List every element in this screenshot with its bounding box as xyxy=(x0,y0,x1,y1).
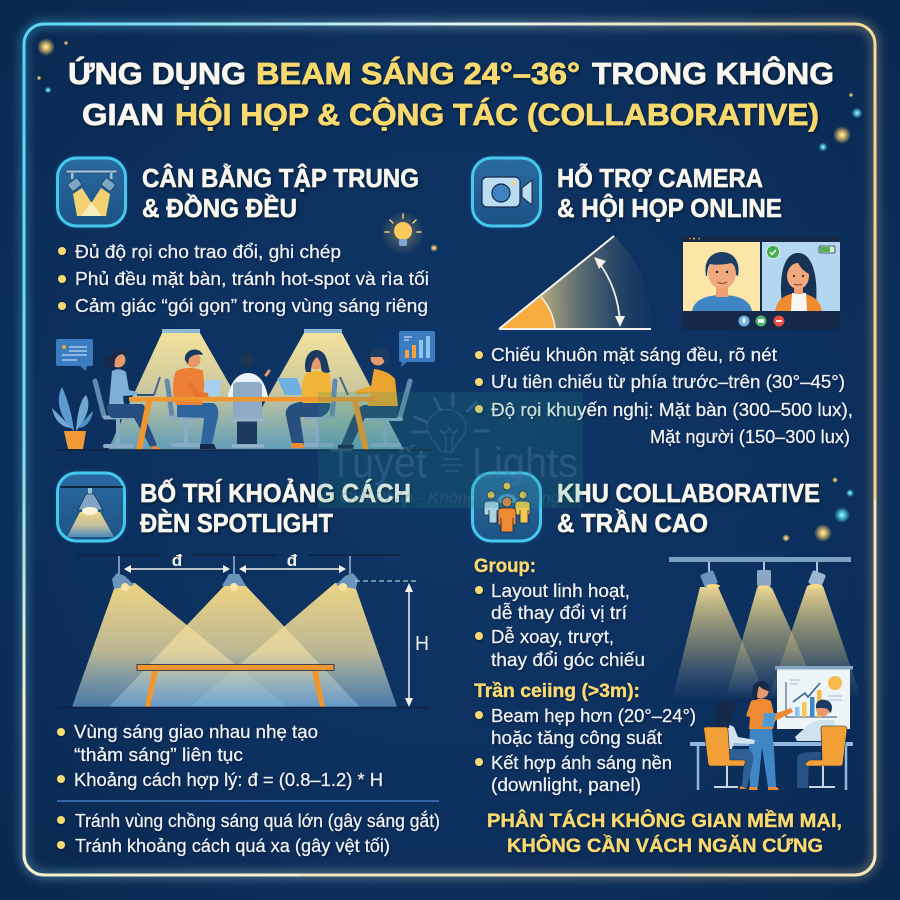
presenter xyxy=(746,681,793,790)
heading: CÂN BẰNG TẬP TRUNG xyxy=(142,163,419,193)
panel: khu collaborative xyxy=(472,473,862,857)
icon: pendant spotlight xyxy=(58,473,124,541)
video participant: man xyxy=(692,252,752,311)
icon: group of people xyxy=(472,473,540,541)
heading xyxy=(557,478,820,538)
heading: & ĐỒNG ĐỀU xyxy=(142,193,297,223)
bullet list: Cảm giác “gói gọn” trong vùng sáng riêng xyxy=(75,296,428,316)
text: group: Group: xyxy=(474,556,536,577)
icon: track spotlights xyxy=(58,158,126,226)
heading xyxy=(142,163,419,223)
video participant: woman xyxy=(775,253,822,311)
height dimension xyxy=(355,581,429,707)
lamps xyxy=(112,573,358,589)
bullet list: Độ rọi khuyến nghị: Mặt bàn (300–500 lux), xyxy=(491,400,853,420)
bullet list xyxy=(58,242,429,316)
text: group: Layout linh hoạt, xyxy=(491,581,630,601)
heading: & TRẦN CAO xyxy=(557,508,708,538)
heading: BỐ TRÍ KHOẢNG CÁCH xyxy=(140,478,411,508)
left sitter xyxy=(704,700,755,789)
icon: chat bubble xyxy=(56,339,93,371)
heading: HỖ TRỢ CAMERA xyxy=(557,163,763,193)
heading: KHU COLLABORATIVE xyxy=(557,478,820,508)
right sitter xyxy=(795,700,847,788)
watermark: Tuyết xyxy=(329,439,427,486)
watermark: Giải Pháp - Không Gian Sống xyxy=(340,490,560,507)
bullet list: Khoảng cách hợp lý: đ = (0.8–1.2) * H xyxy=(74,770,383,790)
diagram: spotlight spacing xyxy=(56,551,429,708)
text: trần ceiling: Trần ceiing (>3m): xyxy=(474,681,640,702)
title: BEAM SÁNG 24°–36° xyxy=(256,56,580,91)
table xyxy=(129,397,375,450)
person 2 xyxy=(167,350,222,449)
panel: hỗ trợ camera xyxy=(472,158,853,447)
title: HỘI HỌP & CỘNG TÁC (COLLABORATIVE) xyxy=(175,96,819,132)
watermark: Lights xyxy=(472,439,578,486)
heading: & HỘI HỌP ONLINE xyxy=(557,193,782,223)
illustration: track lights over team xyxy=(669,557,862,790)
text: group: dễ thay đổi vị trí xyxy=(491,602,627,623)
text: group: Dễ xoay, trượt, xyxy=(491,626,614,647)
text: group xyxy=(474,556,645,670)
presentation board xyxy=(775,666,853,729)
text: group: thay đổi góc chiếu xyxy=(491,650,645,670)
title: TRONG KHÔNG xyxy=(592,55,834,91)
table xyxy=(690,742,853,790)
person 5 xyxy=(338,347,410,449)
diagram: beam angle xyxy=(499,236,651,329)
panel: bố trí khoảng cách xyxy=(56,473,440,856)
bullet list xyxy=(57,722,383,790)
heading xyxy=(140,478,411,538)
warning list: Tránh khoảng cách quá xa (gây vệt tối) xyxy=(75,836,390,856)
icon: chart bubble xyxy=(399,331,435,367)
illustration: video call window xyxy=(682,236,841,330)
text: trần ceiling: (downlight, panel) xyxy=(491,775,641,795)
heading xyxy=(557,163,782,223)
sparkles xyxy=(36,38,862,542)
bullet list: Chiếu khuôn mặt sáng đều, rõ nét xyxy=(491,345,777,365)
bullet list: Vùng sáng giao nhau nhẹ tạo xyxy=(74,722,318,742)
icon: light bulb xyxy=(381,211,425,255)
person 4 xyxy=(277,350,335,448)
watermark xyxy=(318,392,583,508)
height dimension: H xyxy=(415,633,429,655)
bullet list: “thảm sáng” liên tục xyxy=(74,745,243,765)
bullet list xyxy=(475,345,853,447)
warning list xyxy=(57,810,440,856)
bullet list: Phủ đều mặt bàn, tránh hot-spot và rìa tối xyxy=(75,269,429,289)
title: GIAN xyxy=(82,97,164,132)
title xyxy=(68,55,834,132)
title: ỨNG DỤNG xyxy=(68,55,246,91)
closing statement xyxy=(487,810,842,857)
spacing arrows xyxy=(124,565,346,573)
icon: potted plant xyxy=(52,387,93,449)
closing statement: KHÔNG CẦN VÁCH NGĂN CỨNG xyxy=(507,835,823,857)
text: trần ceiling: hoặc tăng công suất xyxy=(491,728,662,748)
diagram: spotlight spacing: đ xyxy=(172,551,183,570)
person 3 xyxy=(228,352,269,446)
bullet list: Mặt người (150–300 lux) xyxy=(650,427,850,447)
icon: video camera xyxy=(472,158,540,226)
closing statement: PHÂN TÁCH KHÔNG GIAN MỀM MẠI, xyxy=(487,810,842,832)
illustration: meeting table xyxy=(52,329,435,450)
person 1 xyxy=(95,350,162,450)
heading: ĐÈN SPOTLIGHT xyxy=(140,508,333,538)
bullet list: Ưu tiên chiếu từ phía trước–trên (30°–45°) xyxy=(491,372,845,392)
panel: cân bằng tập trung xyxy=(52,158,435,450)
text: trần ceiling: Beam hẹp hơn (20°–24°) xyxy=(491,706,696,726)
text: trần ceiling xyxy=(474,681,696,795)
table xyxy=(137,664,334,707)
warning list: Tránh vùng chồng sáng quá lớn (gây sáng gắt) xyxy=(75,810,440,831)
diagram: spotlight spacing: đ xyxy=(287,551,298,570)
bullet list: Đủ độ rọi cho trao đổi, ghi chép xyxy=(75,242,341,262)
text: trần ceiling: Kết hợp ánh sáng nền xyxy=(491,753,672,773)
